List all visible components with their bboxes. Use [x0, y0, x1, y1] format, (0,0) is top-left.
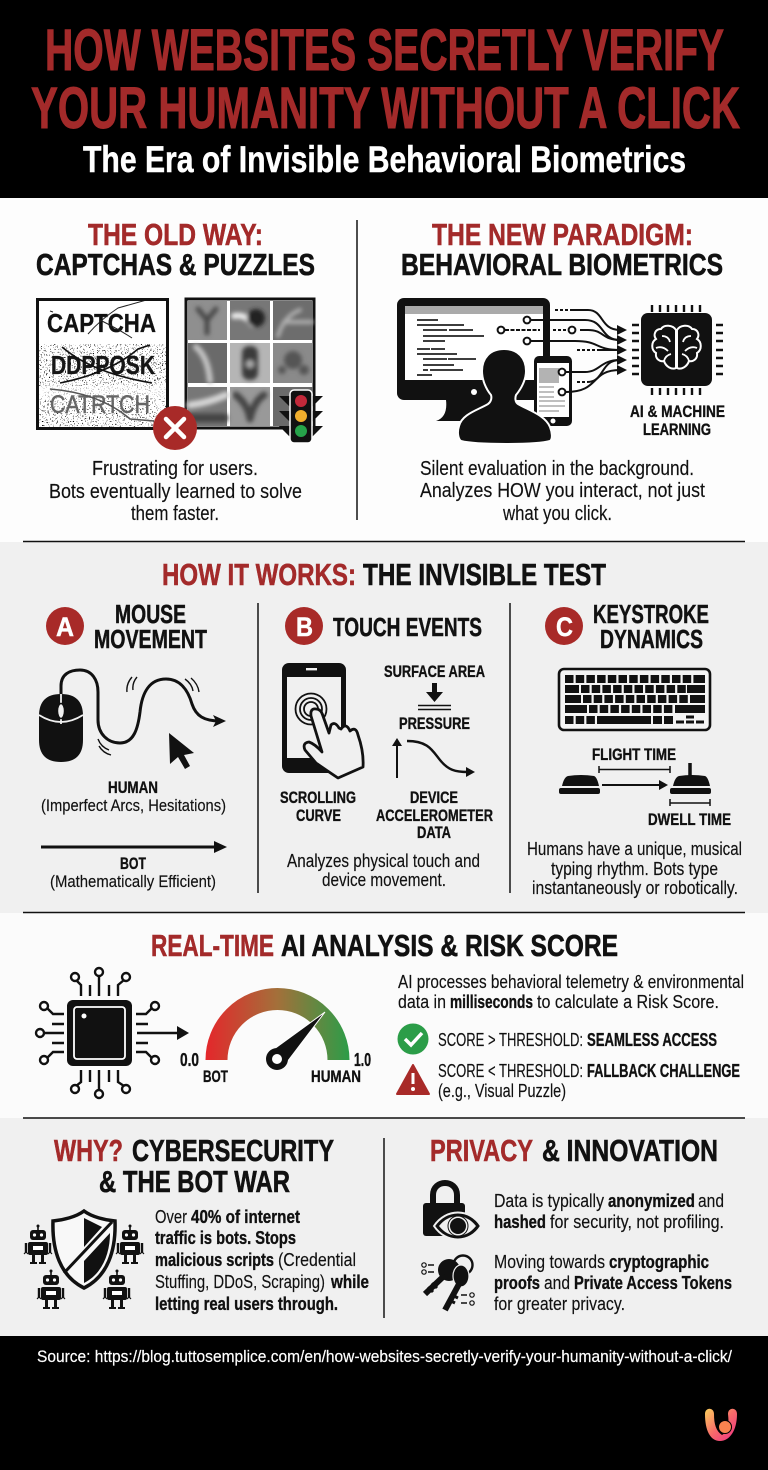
text: cryptographic proofs: Private Access Tokens: [574, 1273, 732, 1293]
text: data anonymized: anonymized: [608, 1191, 695, 1211]
label: AI and machine learning: LEARNING: [643, 420, 711, 439]
heading: the old way: [36, 217, 315, 282]
text: keystroke description: [527, 839, 742, 898]
label: device accelerometer data: DATA: [417, 823, 451, 842]
text: old way description: Frustrating for users.: [92, 458, 258, 480]
label: scrolling curve: [280, 788, 356, 825]
heading: real-time analysis: [151, 928, 618, 963]
heading: the new paradigm: THE NEW PARADIGM:: [432, 217, 693, 252]
text: bot traffic description: Stuffing, DDoS, Scraping): [155, 1272, 325, 1292]
icon: warning triangle: [397, 1065, 429, 1094]
panel: how it works: [0, 542, 768, 913]
badge C: C: [556, 612, 573, 642]
heading: touch events: TOUCH EVENTS: [333, 612, 482, 642]
acceleration arrows: [392, 738, 475, 778]
captcha text box: DDPPOSK: [51, 350, 155, 380]
risk score gauge: BOT: [203, 1067, 228, 1086]
label: AI and machine learning: [630, 402, 725, 439]
heading: privacy and innovation: PRIVACY: [430, 1133, 533, 1168]
icons: bots: [24, 1224, 144, 1309]
data flow arrows: [498, 310, 627, 395]
panel: old way vs new paradigm: [0, 198, 768, 542]
bot straight arrow: [41, 841, 227, 853]
icon: AI brain chip: [632, 305, 723, 395]
text: bot traffic description: letting real users through.: [155, 1294, 338, 1314]
text: bot traffic description: 40% of internet: [191, 1207, 300, 1227]
icon: smartphone: [534, 356, 572, 426]
label: bot: [50, 854, 216, 891]
captcha text box: [37, 299, 168, 428]
icon: green check: [398, 1024, 428, 1054]
text: bot traffic description: [155, 1207, 369, 1314]
heading: why cybersecurity: CYBERSECURITY: [132, 1133, 334, 1168]
text: score above threshold: SCORE > THRESHOLD:: [438, 1030, 583, 1050]
label: bot: BOT: [120, 854, 146, 873]
badge C: [545, 607, 583, 645]
icon: red X: [153, 406, 197, 450]
heading: privacy and innovation: [430, 1133, 718, 1168]
label: scrolling curve: CURVE: [296, 806, 341, 825]
heading: the new paradigm: [401, 217, 723, 282]
text: score below threshold: SCORE < THRESHOLD:: [438, 1061, 583, 1081]
text: touch description: [287, 851, 480, 890]
text: data anonymized: and: [698, 1191, 724, 1211]
text: cryptographic proofs: proofs: [494, 1273, 540, 1293]
heading: how it works: THE INVISIBLE TEST: [363, 557, 606, 592]
heading: how it works: HOW IT WORKS:: [162, 557, 356, 592]
text: data anonymized: for security, not profiling.: [550, 1212, 724, 1232]
text: analysis description: to calculate a Risk Score.: [537, 992, 719, 1012]
text: bot traffic description: Over: [155, 1207, 187, 1227]
heading: keystroke dynamics: DYNAMICS: [600, 624, 703, 654]
text: keystroke description: typing rhythm. Bots type: [551, 859, 718, 879]
heading: real-time analysis: AI ANALYSIS & RISK SCORE: [281, 928, 618, 963]
text: new paradigm description: Analyzes HOW you interact, not just: [420, 480, 705, 502]
heading: why cybersecurity: [54, 1133, 334, 1199]
heading: the old way: THE OLD WAY:: [88, 217, 263, 252]
heading: the old way: CAPTCHAS & PUZZLES: [36, 247, 315, 282]
text: bot traffic description: (Credential: [278, 1250, 356, 1270]
risk score gauge: 1.0: [354, 1050, 371, 1070]
text: keystroke description: instantaneously or robotically.: [532, 878, 738, 898]
text: bot traffic description: while: [330, 1272, 369, 1292]
text: new paradigm description: Silent evaluation in the background.: [420, 458, 694, 480]
heading: how it works: [162, 557, 606, 592]
arrow: chip to gauge: [137, 1026, 189, 1040]
icon: processor chip: [36, 968, 159, 1098]
text: cryptographic proofs: Moving towards: [494, 1252, 605, 1272]
heading: keystroke dynamics: KEYSTROKE: [593, 599, 709, 629]
text: cryptographic proofs: cryptographic: [609, 1252, 709, 1272]
header banner: [31, 18, 740, 180]
label: flight time: FLIGHT TIME: [592, 745, 676, 764]
icon: mouse: [39, 694, 83, 762]
text: new paradigm description: what you click.: [502, 503, 612, 525]
text: touch description: Analyzes physical touch and: [287, 851, 480, 871]
text: analysis description: [398, 972, 744, 1012]
text: score below threshold: [438, 1061, 740, 1101]
text: data anonymized: Data is typically: [494, 1191, 604, 1211]
text: bot traffic description: traffic is bots. Stops: [155, 1228, 296, 1248]
label: human: HUMAN: [108, 778, 158, 797]
label: human: (Imperfect Arcs, Hesitations): [41, 796, 226, 815]
panel: why and privacy: [0, 1118, 768, 1336]
icon: phone with touching hand: [282, 663, 363, 778]
text: new paradigm description: [420, 458, 705, 525]
text: score above threshold: SEAMLESS ACCESS: [587, 1030, 717, 1050]
heading: mouse movement: [94, 599, 207, 654]
label: bot: (Mathematically Efficient): [50, 872, 216, 891]
label: device accelerometer data: ACCELEROMETER: [376, 806, 493, 825]
icon: traffic light: [279, 390, 323, 443]
heading: real-time analysis: REAL-TIME: [151, 928, 274, 963]
heading: mouse movement: MOVEMENT: [94, 624, 207, 654]
captcha text box: CAPTCHA: [47, 308, 156, 338]
heading: privacy and innovation: & INNOVATION: [542, 1133, 718, 1168]
column C: keystroke dynamics: [527, 599, 742, 898]
text: analysis description: data in: [398, 992, 446, 1012]
badge B: [285, 607, 323, 645]
label: pressure: PRESSURE: [399, 714, 470, 733]
text: old way description: Bots eventually learned to solve: [49, 481, 302, 503]
badge A: [46, 607, 84, 645]
label: device accelerometer data: [376, 788, 493, 842]
risk score gauge: HUMAN: [311, 1067, 361, 1086]
title: [31, 18, 740, 141]
icon: shield: [53, 1211, 115, 1288]
column A: mouse movement: [39, 599, 227, 891]
human mouse path: [61, 670, 226, 755]
icon: keyboard: [559, 669, 710, 730]
text: old way description: [49, 458, 302, 525]
panel: real-time AI analysis: [0, 912, 768, 1118]
heading: mouse movement: MOUSE: [115, 599, 186, 629]
risk score gauge: 0.0: [180, 1050, 199, 1070]
captcha text box: CATRTCH: [50, 391, 150, 419]
label: human: [41, 778, 226, 815]
risk score gauge: [180, 999, 371, 1086]
text: touch description: device movement.: [322, 870, 446, 890]
text: old way description: them faster.: [131, 503, 219, 525]
flight and dwell diagram: [559, 763, 711, 806]
icon: monitor with code: [397, 298, 550, 421]
label: scrolling curve: SCROLLING: [280, 788, 356, 807]
pressure arrow: [418, 683, 451, 710]
heading: keystroke dynamics: [593, 599, 709, 654]
icon: user silhouette: [458, 349, 552, 444]
icon: padlock with eye: [423, 1183, 481, 1240]
text: data anonymized: hashed: [494, 1212, 546, 1232]
label: dwell time: DWELL TIME: [648, 810, 731, 829]
text: cryptographic proofs: [494, 1252, 732, 1314]
label: device accelerometer data: DEVICE: [410, 788, 458, 807]
heading: why cybersecurity: WHY?: [54, 1133, 123, 1168]
icon: keys: [422, 1256, 474, 1310]
text: cryptographic proofs: for greater privacy.: [494, 1294, 625, 1314]
text: analysis description: milliseconds: [450, 992, 533, 1012]
image puzzle grid: [186, 299, 314, 428]
text: data anonymized: [494, 1191, 724, 1232]
text: score below threshold: (e.g., Visual Puzzle): [438, 1081, 566, 1101]
label: AI and machine learning: AI & MACHINE: [630, 402, 725, 421]
logo: [705, 1409, 737, 1441]
badge A: A: [56, 612, 74, 642]
column B: touch events: [280, 607, 493, 890]
heading: why cybersecurity: & THE BOT WAR: [99, 1164, 290, 1199]
badge B: B: [296, 612, 313, 642]
text: bot traffic description: malicious scripts: [155, 1250, 274, 1270]
text: cryptographic proofs: and: [544, 1273, 570, 1293]
label: surface area: SURFACE AREA: [384, 662, 485, 681]
icon: cursor: [169, 733, 194, 769]
